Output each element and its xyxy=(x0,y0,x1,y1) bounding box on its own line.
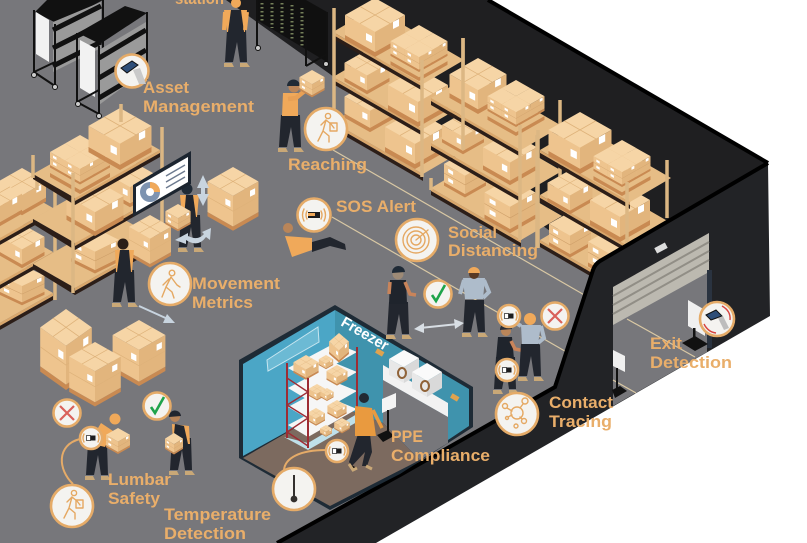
badge: sos xyxy=(298,198,330,232)
badge: check center xyxy=(424,280,452,308)
label: exit detection: Exit xyxy=(650,335,683,353)
shelving unit 1 xyxy=(333,0,464,181)
arrow: distancing xyxy=(414,319,464,333)
badge: cross left xyxy=(54,400,80,426)
floor pallets xyxy=(40,309,165,406)
worker: center right xyxy=(460,267,489,337)
rack: front server rack xyxy=(76,6,147,118)
freezer stand xyxy=(377,393,396,442)
label: contact tracing: Contact xyxy=(549,394,614,412)
label: movement metrics: Movement xyxy=(192,275,281,293)
badge: exit detection xyxy=(700,302,734,336)
badge: lumbar safety xyxy=(51,485,93,527)
badge: asset device xyxy=(116,54,148,88)
arrows: movement xyxy=(175,175,211,244)
worker: check xyxy=(165,410,195,475)
badge: social distancing xyxy=(396,219,438,261)
wall monitor xyxy=(133,151,191,217)
connector: lumbar xyxy=(62,439,80,484)
front wall xyxy=(277,163,770,543)
label: movement metrics: Metrics xyxy=(192,294,253,312)
freezer rack xyxy=(284,333,357,450)
badge: thermometer xyxy=(273,468,315,510)
worker: contact left xyxy=(493,323,525,394)
worker: lying xyxy=(283,223,346,257)
label: asset management: Asset xyxy=(143,79,190,97)
badge: sensor lower xyxy=(496,359,518,381)
badge: sensor freezer xyxy=(326,440,348,462)
pallet box stack by shelf xyxy=(129,215,171,268)
back wall xyxy=(226,0,768,263)
label: contact tracing: Tracing xyxy=(549,413,612,431)
floor xyxy=(0,0,610,543)
label: ppe compliance: Compliance xyxy=(391,447,490,465)
label: temperature detection: Detection xyxy=(164,525,246,543)
label: exit detection: Detection xyxy=(650,354,732,372)
shelving: left unit A xyxy=(0,168,55,348)
label: reaching: Reaching xyxy=(288,156,367,174)
badge: movement xyxy=(149,263,191,305)
label: lumbar safety: Lumbar xyxy=(108,471,172,489)
badge: check left xyxy=(144,392,170,420)
label: social distancing: Social xyxy=(448,224,497,242)
freezer sign: Freezer xyxy=(338,314,392,355)
exit door bay xyxy=(612,233,712,406)
floor guide lines xyxy=(332,150,600,354)
badge: sensor lumbar xyxy=(80,427,102,449)
shelving unit 3 xyxy=(538,112,671,299)
badge: reaching xyxy=(305,108,347,150)
worker: freezer hoodie xyxy=(349,393,382,470)
rack: left server rack xyxy=(32,0,103,90)
worker: dark skin xyxy=(112,238,138,307)
connector: temperature xyxy=(284,450,326,470)
worker: lumbar xyxy=(85,414,130,480)
rack: back black rack xyxy=(256,0,328,66)
label: temperature detection: Temperature xyxy=(164,506,271,524)
worker: center left xyxy=(386,266,416,339)
arrow: forward xyxy=(139,306,175,323)
label: sos alert: SOS Alert xyxy=(336,198,417,216)
worker: monitor xyxy=(165,184,204,252)
pallet box stack near monitor xyxy=(208,167,258,231)
label: asset management: Management xyxy=(143,98,255,116)
cooling units xyxy=(389,350,442,397)
worker: reaching xyxy=(278,70,325,152)
badge: contact tracing xyxy=(496,393,538,435)
freezer room xyxy=(239,305,473,510)
label: lumbar safety: Safety xyxy=(108,490,161,508)
badge: cross right xyxy=(542,302,568,330)
worker: contact right xyxy=(508,313,544,381)
wall black edge xyxy=(277,0,768,543)
shelving unit 2 xyxy=(431,38,562,248)
badge: sensor xyxy=(498,305,520,327)
label: social distancing: Distancing xyxy=(448,242,538,260)
label: ppe compliance: PPE xyxy=(391,428,423,446)
shelving: left unit B xyxy=(33,104,162,295)
worker: station xyxy=(224,0,250,67)
